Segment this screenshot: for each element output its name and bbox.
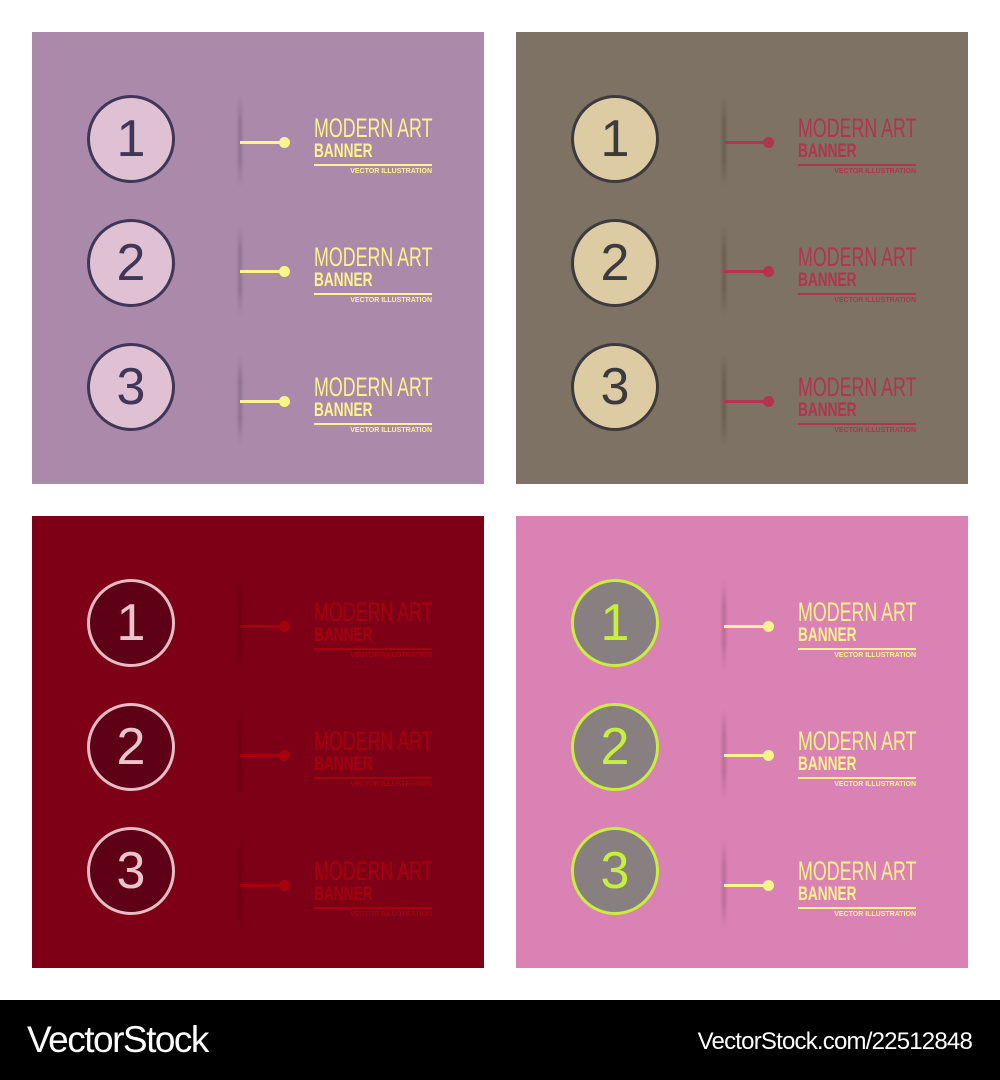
text block (314, 113, 432, 175)
text block: MODERN ART (798, 242, 916, 272)
connector (724, 396, 774, 407)
row 3 (87, 827, 432, 918)
connector (724, 880, 774, 891)
circle 1: 1 (117, 594, 145, 652)
text block: BANNER (314, 625, 373, 646)
text block (798, 242, 916, 304)
text block: BANNER (798, 400, 857, 421)
text block: MODERN ART (314, 726, 432, 756)
text block (798, 597, 916, 659)
connector (724, 137, 774, 148)
text block: BANNER (314, 270, 373, 291)
circle 1: 1 (117, 110, 145, 168)
connector (240, 137, 290, 148)
connector (240, 396, 290, 407)
circle 1: 1 (601, 110, 629, 168)
panel: taupe (516, 32, 968, 484)
connector (724, 750, 774, 761)
text block: MODERN ART (314, 242, 432, 272)
panel: pink (516, 516, 968, 968)
text block: MODERN ART (798, 372, 916, 402)
row 1: VECTOR ILLUSTRATION (834, 652, 916, 659)
connector (724, 621, 774, 632)
text block: MODERN ART (798, 597, 916, 627)
text block (314, 242, 432, 304)
text block: BANNER (314, 400, 373, 421)
row 2: VECTOR ILLUSTRATION (350, 781, 432, 788)
text block: MODERN ART (798, 113, 916, 143)
connector (240, 880, 290, 891)
text block: BANNER (314, 141, 373, 162)
circle 2: 2 (601, 234, 629, 292)
text block: MODERN ART (314, 372, 432, 402)
circle 2: 2 (117, 234, 145, 292)
text block (798, 726, 916, 788)
row 3 (571, 827, 916, 923)
footer id: VectorStock.com/22512848 (698, 1028, 972, 1055)
circle 2 (87, 703, 175, 791)
row 2 (571, 219, 916, 307)
row 1 (571, 95, 916, 183)
row 1: VECTOR ILLUSTRATION (350, 652, 432, 659)
text block (314, 856, 432, 918)
text block: MODERN ART (798, 856, 916, 886)
row 1 (87, 579, 432, 667)
circle 3: 3 (601, 358, 629, 416)
connector (240, 750, 290, 761)
circle 3 (87, 827, 175, 915)
text block (798, 856, 916, 918)
text block (314, 372, 432, 434)
text block (798, 113, 916, 175)
circle 2: 2 (117, 718, 145, 776)
circle 2 (87, 219, 175, 307)
circle 1 (571, 579, 659, 667)
text block: MODERN ART (314, 856, 432, 886)
row 3: VECTOR ILLUSTRATION (834, 427, 916, 434)
row 2 (87, 703, 432, 791)
circle 2: 2 (601, 718, 629, 776)
row 2 (571, 703, 916, 793)
connector (724, 266, 774, 277)
circle 3 (571, 343, 659, 431)
row 3: VECTOR ILLUSTRATION (350, 911, 432, 918)
connector (240, 266, 290, 277)
row 3: VECTOR ILLUSTRATION (350, 427, 432, 434)
row 3 (571, 343, 916, 434)
circle 3 (87, 343, 175, 431)
text block: BANNER (798, 270, 857, 291)
circle 1 (87, 579, 175, 667)
panel: crimson (32, 516, 484, 968)
text block: MODERN ART (798, 726, 916, 756)
connector (240, 621, 290, 632)
text block (314, 726, 432, 788)
text block: BANNER (798, 141, 857, 162)
circle 1: 1 (601, 594, 629, 652)
circle 1 (87, 95, 175, 183)
row 2: VECTOR ILLUSTRATION (350, 297, 432, 304)
panel: purple (32, 32, 484, 484)
row 3 (87, 343, 432, 438)
row 1: VECTOR ILLUSTRATION (834, 168, 916, 175)
footer (0, 1000, 1000, 1080)
circle 3: 3 (117, 842, 145, 900)
circle 1 (571, 95, 659, 183)
row 1: VECTOR ILLUSTRATION (350, 168, 432, 175)
text block: BANNER (314, 754, 373, 775)
row 1 (571, 579, 916, 667)
text block: MODERN ART (314, 113, 432, 143)
text block: BANNER (798, 884, 857, 905)
circle 3 (571, 827, 659, 915)
footer logo: VectorStock (27, 1019, 208, 1060)
row 1 (87, 95, 432, 183)
row 2: VECTOR ILLUSTRATION (834, 781, 916, 788)
text block: BANNER (314, 884, 373, 905)
row 2: VECTOR ILLUSTRATION (834, 297, 916, 304)
text block (314, 597, 432, 659)
row 3: VECTOR ILLUSTRATION (834, 911, 916, 918)
row 2 (87, 219, 432, 308)
text block: MODERN ART (314, 597, 432, 627)
text block (798, 372, 916, 434)
circle 3: 3 (601, 842, 629, 900)
circle 3: 3 (117, 358, 145, 416)
text block: BANNER (798, 625, 857, 646)
text block: BANNER (798, 754, 857, 775)
circle 2 (571, 703, 659, 791)
circle 2 (571, 219, 659, 307)
